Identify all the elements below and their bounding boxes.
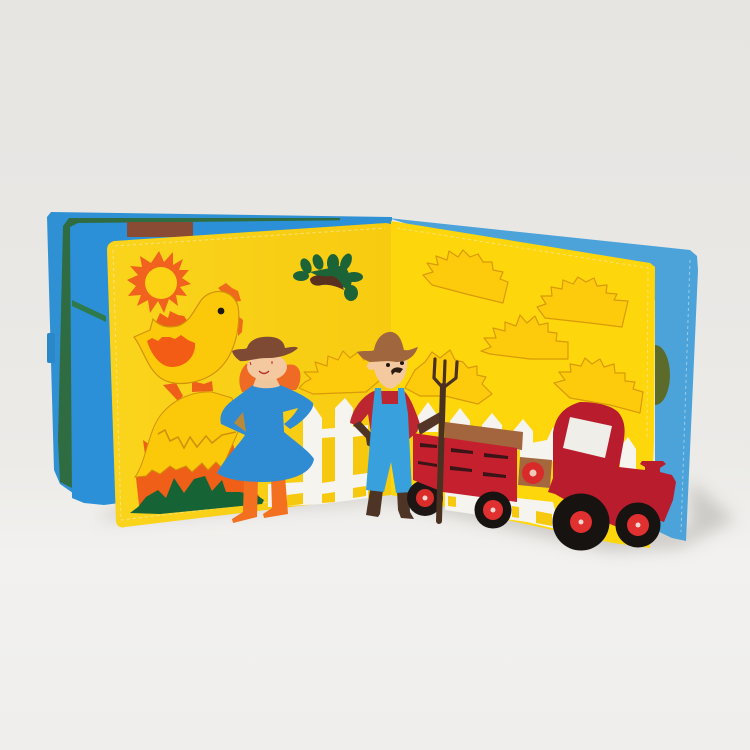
hitch (518, 457, 552, 488)
overalls (366, 388, 412, 493)
trailer front wheel (474, 492, 512, 528)
mustache (391, 367, 403, 375)
tractor and trailer (407, 359, 676, 550)
smile (259, 371, 269, 374)
bale 3 (481, 315, 568, 359)
shadow (100, 480, 735, 552)
comb (218, 283, 241, 302)
stack (135, 392, 238, 477)
fence holes (287, 435, 368, 506)
face (247, 354, 287, 380)
brown tab (127, 222, 193, 237)
eye (218, 308, 224, 314)
eyes (386, 363, 390, 367)
hat (232, 337, 298, 361)
trailer wheel back (407, 480, 443, 516)
bale 2 (537, 277, 628, 327)
woman figure (217, 337, 314, 523)
ear (367, 362, 375, 370)
body (134, 291, 239, 384)
window (563, 417, 612, 458)
page stitching (113, 228, 648, 520)
legs (232, 478, 258, 523)
right yellow page (391, 221, 655, 548)
dress (217, 385, 314, 482)
lower rail holes (448, 496, 552, 526)
dark circle behind right page (655, 345, 670, 405)
side loop (47, 333, 55, 363)
wing (147, 335, 195, 367)
armhole gaps (234, 412, 246, 432)
left fence panel (268, 398, 368, 507)
button detail on rear trailer wheel (422, 496, 428, 500)
stitching on blue cover (681, 260, 690, 532)
icon: chicken (134, 283, 243, 401)
bale 4 (554, 358, 643, 413)
arm holding fork (417, 412, 441, 435)
shirt (350, 391, 420, 440)
fence (268, 398, 636, 530)
green strip (72, 300, 106, 322)
pitchfork (434, 359, 457, 521)
bale 5 (299, 351, 380, 394)
face (372, 358, 407, 389)
front wheel (616, 502, 660, 548)
tail feathers (156, 311, 190, 336)
trailer slots (418, 443, 508, 478)
left yellow page (107, 223, 391, 527)
left cover (47, 212, 392, 503)
back cover: blue (47, 212, 698, 541)
farmer figure (350, 332, 441, 519)
hay bales on right page (299, 250, 643, 413)
stack edge lines (158, 430, 236, 448)
orange behind (136, 440, 262, 505)
icon: sun (127, 251, 191, 313)
neck (253, 376, 280, 388)
feet (163, 383, 183, 401)
tractor body (548, 402, 676, 528)
back wheel (552, 494, 610, 550)
hand left (353, 421, 374, 448)
hat (357, 332, 418, 362)
hair (239, 362, 300, 392)
right cover (388, 218, 698, 541)
boots (366, 490, 383, 517)
haystack left (130, 392, 264, 514)
right fence panel (418, 402, 636, 530)
grass (130, 476, 264, 514)
left inner blue page (70, 220, 380, 505)
bale 6 (405, 350, 492, 404)
icon: leaf branch (293, 252, 363, 301)
trailer bed (413, 433, 517, 502)
bale 1 (423, 250, 508, 303)
trailer brown top (445, 422, 523, 450)
left inner green page (58, 218, 340, 488)
